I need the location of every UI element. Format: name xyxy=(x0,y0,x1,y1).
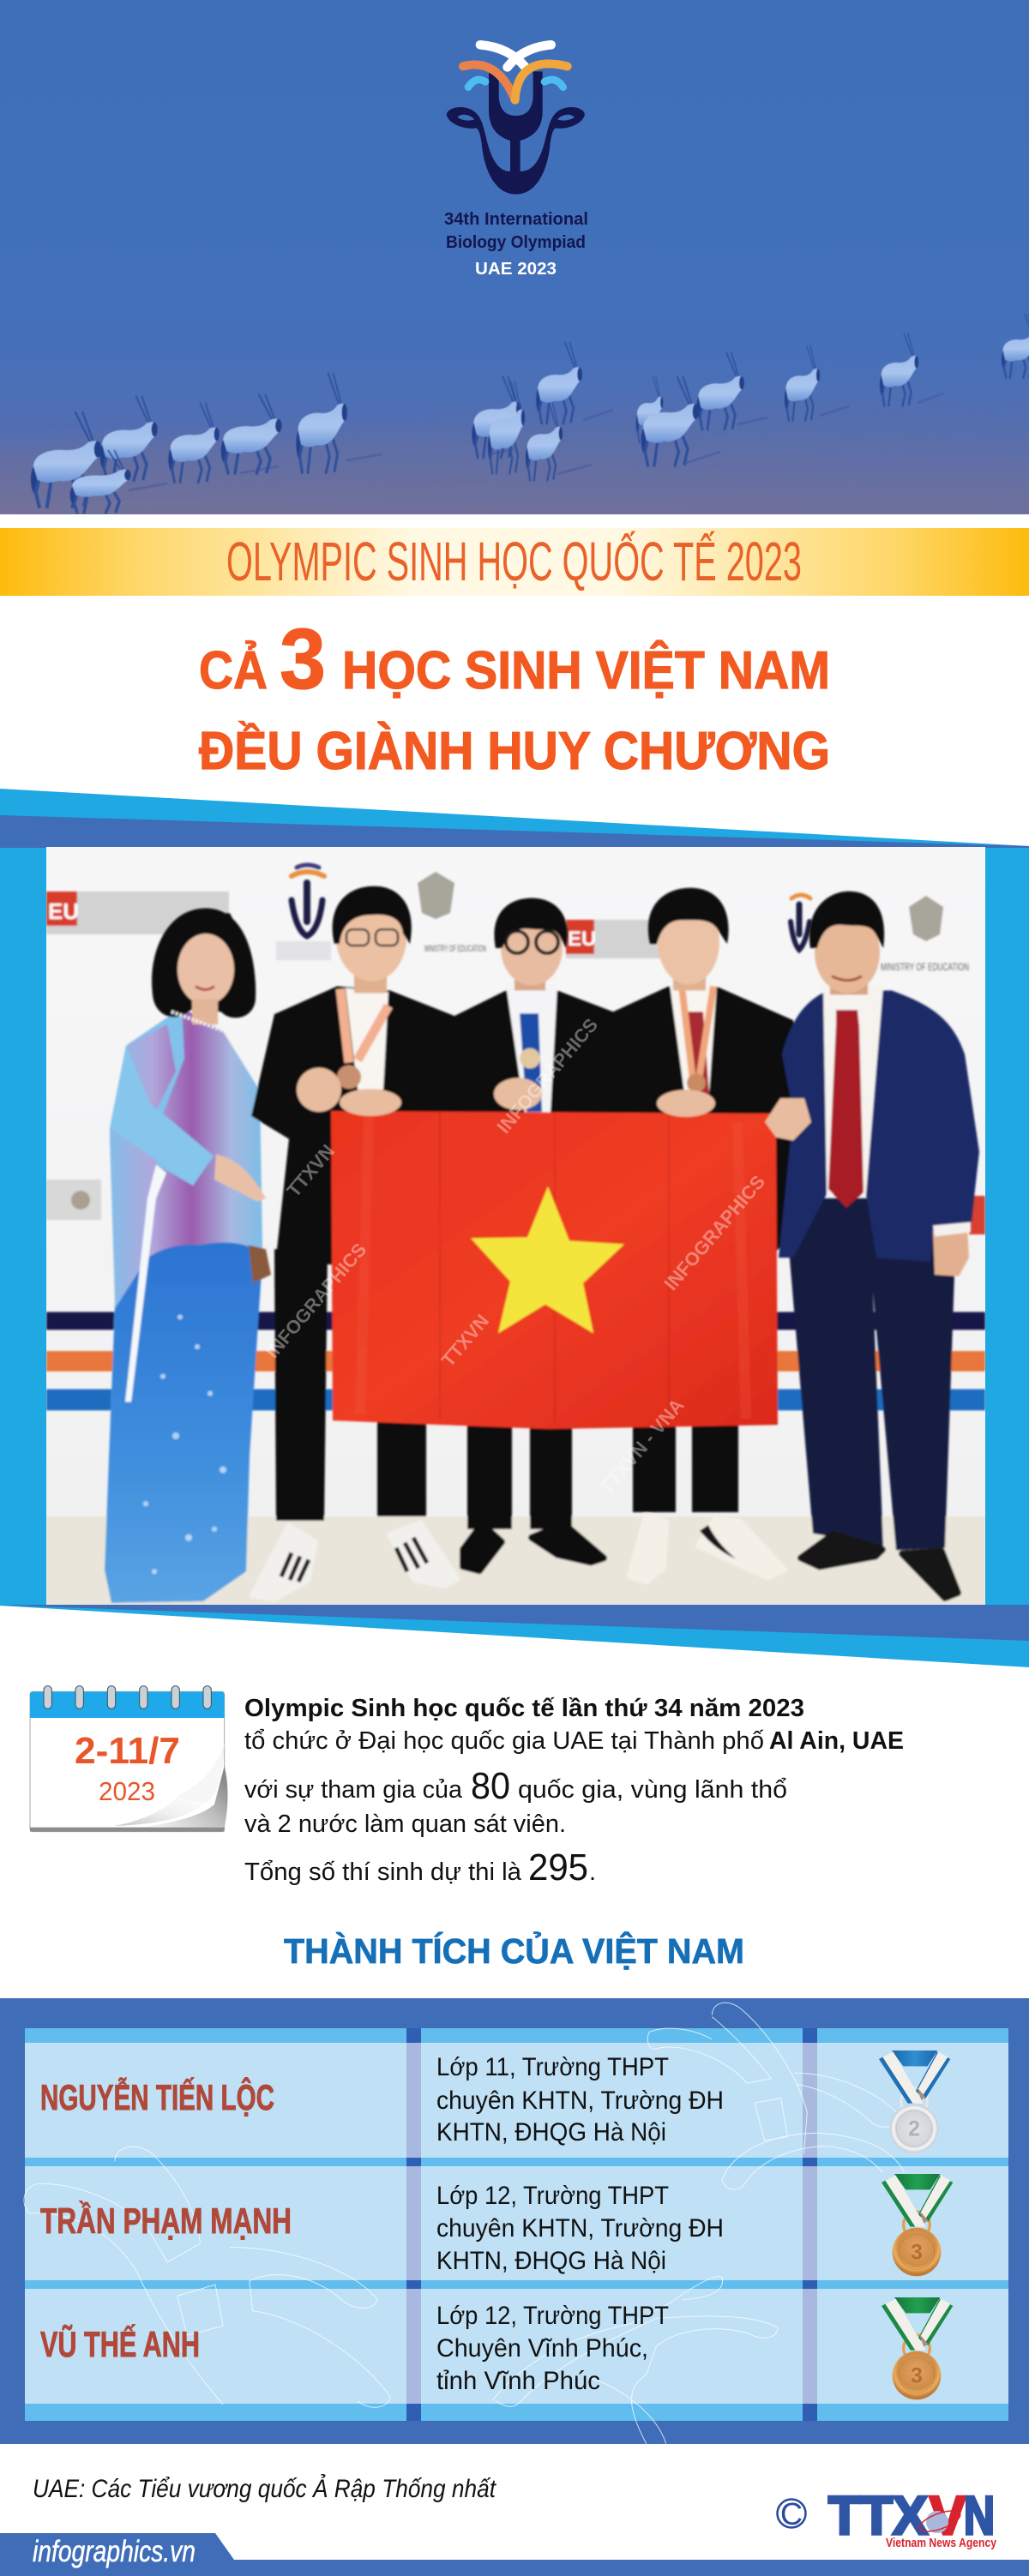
main headline: HỌC SINH VIỆT NAM xyxy=(342,641,830,700)
shirts and medals ribbons xyxy=(337,985,717,1114)
row 1 name and school: NGUYỄN TIẾN LỘC xyxy=(40,2076,274,2117)
row 1 name and school xyxy=(40,2053,724,2147)
row 1 name and school: chuyên KHTN, Trường ĐH xyxy=(436,2087,724,2115)
info text: Olympic Sinh học quốc tế lần thứ 34 năm 2023 xyxy=(244,1695,804,1722)
backdrop banners: MINISTRY OF EDUCATION xyxy=(424,944,486,954)
TTXVN logo: N xyxy=(964,2486,995,2546)
photo watermarks: TTXVN xyxy=(437,1310,493,1371)
hands on flag xyxy=(297,1068,811,1141)
row 3 name and school: Chuyên Vĩnh Phúc, xyxy=(436,2334,648,2363)
photo watermarks: INFOGRAPHICS xyxy=(660,1171,769,1294)
footer band: infographics.vn xyxy=(33,2535,196,2568)
silver medal: 2 xyxy=(908,2118,920,2141)
info text: với sự tham gia của xyxy=(244,1776,463,1804)
info text: . xyxy=(589,1858,596,1886)
row 3 name and school: tỉnh Vĩnh Phúc xyxy=(436,2367,600,2395)
TTXVN logo xyxy=(777,2486,997,2550)
logo caption: Biology Olympiad xyxy=(446,233,586,252)
photo content xyxy=(46,886,985,1610)
calendar icon xyxy=(30,1686,228,1832)
TTXVN logo: Vietnam News Agency xyxy=(886,2536,997,2550)
backdrop stripes and floor xyxy=(46,1312,985,1610)
hero banner: oryx herd on desert xyxy=(0,0,1029,566)
backdrop banners: EU xyxy=(48,898,79,924)
info text: quốc gia, vùng lãnh thổ xyxy=(518,1776,787,1804)
man in navy suit xyxy=(779,892,979,1551)
calendar icon: 2023 xyxy=(99,1776,155,1806)
row 1 name and school: Lớp 11, Trường THPT xyxy=(436,2053,669,2081)
photo watermarks xyxy=(262,1014,769,1498)
bronze medal row 2: 3 xyxy=(911,2242,923,2265)
bronze medal row 3: 3 xyxy=(911,2365,923,2388)
logo caption: UAE 2023 xyxy=(475,260,557,279)
achievements table xyxy=(0,1998,1029,2444)
info text: Tổng số thí sinh dự thi là xyxy=(244,1858,522,1886)
photo watermarks: INFOGRAPHICS xyxy=(493,1014,602,1138)
shoes xyxy=(253,1516,958,1598)
row 2 name and school: KHTN, ĐHQG Hà Nội xyxy=(436,2247,666,2275)
row 2 name and school: TRẦN PHẠM MẠNH xyxy=(40,2201,292,2241)
IBO logo xyxy=(447,45,585,195)
info text xyxy=(244,1695,904,1888)
footer band xyxy=(0,2533,1029,2576)
blue wedge top xyxy=(0,789,1029,1606)
footnote: UAE: Các Tiểu vương quốc Ả Rập Thống nhất xyxy=(33,2474,496,2503)
row 3 name and school xyxy=(40,2302,669,2395)
backdrop banners xyxy=(46,865,985,1234)
photo watermarks: INFOGRAPHICS xyxy=(262,1239,370,1362)
backdrop banners: MINISTRY OF EDUCATION xyxy=(881,961,969,973)
row 2 name and school: Lớp 12, Trường THPT xyxy=(436,2182,669,2210)
info text: Al Ain, UAE xyxy=(769,1727,904,1755)
section heading: THÀNH TÍCH CỦA VIỆT NAM xyxy=(284,1931,744,1971)
TTXVN logo: C xyxy=(780,2496,803,2531)
oryx shadows on sand xyxy=(129,393,943,490)
info text: tổ chức ở Đại học quốc gia UAE tại Thành phố xyxy=(244,1727,764,1755)
main headline xyxy=(199,611,830,781)
bronze medal row 3 xyxy=(882,2297,953,2399)
student heads xyxy=(333,886,729,993)
row 2 name and school xyxy=(40,2182,724,2275)
info text: và 2 nước làm quan sát viên. xyxy=(244,1810,566,1838)
row 1 name and school: KHTN, ĐHQG Hà Nội xyxy=(436,2118,666,2147)
table columns xyxy=(25,2028,1008,2421)
calendar icon: 2-11/7 xyxy=(75,1730,180,1772)
group photo xyxy=(46,847,985,1610)
main headline: ĐỀU GIÀNH HUY CHƯƠNG xyxy=(199,722,830,781)
backdrop banners: EU xyxy=(568,928,596,951)
row 3 name and school: Lớp 12, Trường THPT xyxy=(436,2302,669,2330)
row 2 name and school: chuyên KHTN, Trường ĐH xyxy=(436,2214,724,2243)
main headline: CẢ xyxy=(199,641,268,700)
woman in ao dai xyxy=(105,908,271,1603)
main headline: 3 xyxy=(280,611,326,707)
silver medal xyxy=(879,2051,950,2153)
photo watermarks: TTXVN - VNA xyxy=(596,1395,689,1498)
logo caption: 34th International xyxy=(444,210,588,229)
blue wedge bottom xyxy=(0,1605,1029,1667)
bronze medal row 2 xyxy=(882,2174,953,2276)
decorative outlines xyxy=(24,2003,905,2444)
TTXVN logo: V xyxy=(930,2486,966,2546)
TTXVN logo: TTX xyxy=(828,2486,928,2546)
logo caption xyxy=(444,210,588,279)
row 3 name and school: VŨ THẾ ANH xyxy=(40,2323,200,2364)
students jackets xyxy=(251,987,806,1529)
Vietnamese flag xyxy=(331,1111,778,1429)
photo watermarks: TTXVN xyxy=(283,1140,339,1201)
oryx herd xyxy=(31,314,1029,513)
info text: 295 xyxy=(528,1846,588,1888)
info text: 80 xyxy=(471,1765,510,1807)
